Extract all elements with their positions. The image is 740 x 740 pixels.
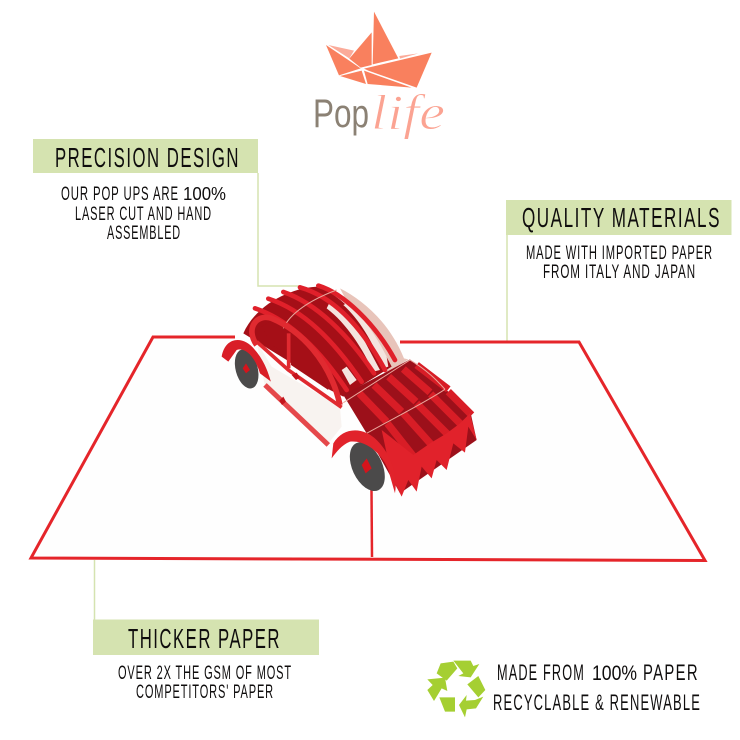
car door frame: [252, 317, 340, 405]
open pop-up card: [30, 337, 706, 561]
car body sill: [257, 342, 342, 407]
recycle text: PAPER: [643, 660, 699, 685]
icon: recycle arrows: [427, 661, 485, 717]
icon: front wheel: [343, 437, 392, 497]
car cabin interior: [243, 287, 392, 397]
icon: paper boat: [326, 12, 432, 88]
icon: rear wheel: [231, 347, 262, 391]
leader line: quality materials: [506, 235, 508, 342]
car hood: [343, 359, 477, 493]
recycle text: MADE FROM: [497, 660, 585, 685]
body text: [526, 243, 713, 283]
banner: THICKER PAPER: [128, 623, 281, 654]
body text: OVER 2X THE GSM OF MOST: [118, 663, 292, 684]
body text: ASSEMBLED: [107, 223, 181, 244]
body text: [118, 663, 292, 703]
banner: [33, 139, 258, 173]
car side windows: [262, 320, 328, 390]
car rear fender: [222, 340, 271, 382]
body text: OUR POP UPS ARE: [61, 184, 179, 205]
car front fender: [332, 430, 396, 493]
car white gaps between ribs: [327, 302, 388, 385]
leader line: precision design: [258, 173, 300, 286]
banner: PRECISION DESIGN: [55, 142, 240, 173]
car roof back panel: [340, 288, 408, 373]
logo wordmark: Pop: Pop: [313, 92, 369, 136]
callout: precision design: [33, 139, 258, 244]
body text: LASER CUT AND HAND: [75, 204, 212, 225]
body text: [61, 184, 226, 244]
car roof ribs: [255, 286, 395, 390]
recycle text: 100%: [592, 662, 637, 685]
car white door panel: [257, 342, 342, 443]
callout: thicker paper: [93, 620, 319, 703]
pop-up car: [222, 286, 477, 497]
body text: 100%: [183, 184, 226, 204]
body text: COMPETITORS' PAPER: [136, 682, 274, 703]
banner: [93, 620, 319, 655]
car roof cross rib: [283, 290, 337, 328]
car hood fins: [359, 365, 472, 458]
car grille fins: [382, 413, 477, 497]
callout: recyclable: [427, 660, 701, 717]
leader line: thicker paper: [94, 560, 96, 620]
car hood cross ribs: [343, 360, 445, 433]
logo: Poplife paper boat: [313, 12, 445, 140]
callout: quality materials: [506, 200, 732, 283]
recycle text: [493, 660, 701, 715]
logo wordmark: life: life: [371, 84, 445, 140]
